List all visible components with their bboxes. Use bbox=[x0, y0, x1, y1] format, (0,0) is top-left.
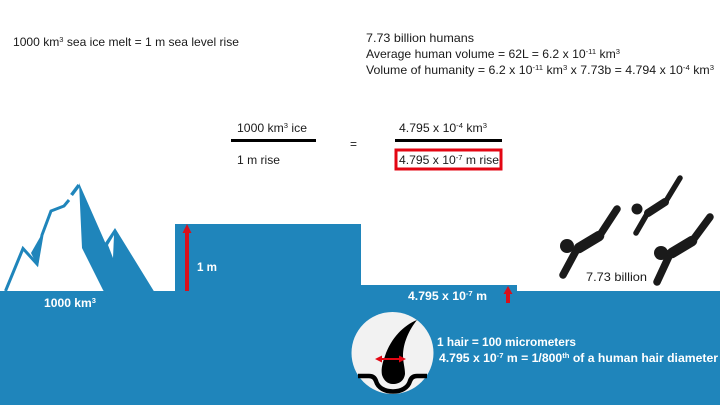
text block: volume of humanity: x 7.73b = 4.794 x 10 bbox=[567, 63, 683, 77]
text block: volume of humanity: 3 bbox=[710, 63, 714, 72]
text block: volume of humanity: -11 bbox=[532, 63, 543, 72]
text block: hair comparison: of a human hair diameter bbox=[569, 351, 718, 365]
label: human rise: m bbox=[473, 289, 487, 303]
label: human population: 7.73 billion bbox=[586, 270, 647, 284]
arrow: hair diameter bbox=[375, 356, 406, 362]
heading: sea ice melt rule: 3 bbox=[59, 35, 64, 44]
text block: volume of humanity: km bbox=[690, 63, 710, 77]
heading: sea ice melt rule: 1000 km bbox=[13, 35, 59, 49]
text block: hair comparison: m = 1/800 bbox=[503, 351, 563, 365]
highlighted result: 4.795 x 10 bbox=[399, 153, 455, 167]
icon: human figure top bbox=[632, 178, 680, 233]
label: iceberg volume: 1000 km bbox=[44, 296, 91, 310]
left fraction: ice bbox=[288, 121, 307, 135]
label: human rise: 4.795 x 10 bbox=[408, 289, 465, 303]
arrow: human rise bbox=[504, 286, 512, 303]
label: human rise: -7 bbox=[466, 289, 473, 298]
highlighted result: m rise bbox=[463, 153, 499, 167]
text block: volume of humanity: -4 bbox=[683, 63, 690, 72]
label: 1 m: 1 m bbox=[197, 260, 217, 274]
right fraction: -4 bbox=[456, 121, 463, 130]
text block: volume of humanity: Volume of humanity = 6.2 x 10 bbox=[366, 63, 528, 77]
water with raised sea level blocks bbox=[0, 224, 720, 405]
left fraction bbox=[231, 121, 316, 167]
text block: hair comparison: th bbox=[562, 351, 570, 360]
equals sign: = bbox=[350, 137, 357, 151]
text block: volume of humanity: -11 bbox=[586, 47, 596, 56]
text block: volume of humanity: 7.73 billion humans bbox=[366, 31, 474, 45]
heading: sea ice melt rule: sea ice melt = 1 m sea level rise bbox=[64, 35, 239, 49]
text block: hair comparison bbox=[437, 335, 718, 365]
text block: volume of humanity: km bbox=[596, 47, 616, 61]
text block: hair comparison: 1 hair = 100 micrometers bbox=[437, 335, 576, 349]
right fraction: 3 bbox=[483, 121, 487, 130]
text block: volume of humanity: 3 bbox=[563, 63, 567, 72]
icon: iceberg bbox=[5, 183, 155, 300]
left fraction: 1000 km bbox=[237, 121, 283, 135]
text block: hair comparison: 4.795 x 10 bbox=[439, 351, 496, 365]
text block: volume of humanity: km bbox=[543, 63, 563, 77]
text block: volume of humanity: Average human volume = 62L = 6.2 x 10 bbox=[366, 47, 582, 61]
icon: human figure right bbox=[654, 217, 710, 282]
right fraction bbox=[395, 121, 502, 169]
left fraction: 3 bbox=[284, 121, 288, 130]
icon: hair cross-section bbox=[352, 312, 434, 394]
right fraction: 4.795 x 10 bbox=[399, 121, 455, 135]
right fraction: km bbox=[463, 121, 483, 135]
text block: volume of humanity bbox=[366, 31, 714, 77]
left fraction: 1 m rise bbox=[237, 153, 280, 167]
highlighted result: -7 bbox=[456, 153, 463, 162]
label: iceberg volume: 3 bbox=[92, 296, 96, 305]
text block: hair comparison: -7 bbox=[497, 351, 503, 360]
text block: volume of humanity: 3 bbox=[616, 47, 620, 56]
highlighted result bbox=[396, 150, 501, 169]
icon: human figure left bbox=[560, 209, 617, 275]
arrow: 1 m rise bbox=[182, 224, 192, 291]
